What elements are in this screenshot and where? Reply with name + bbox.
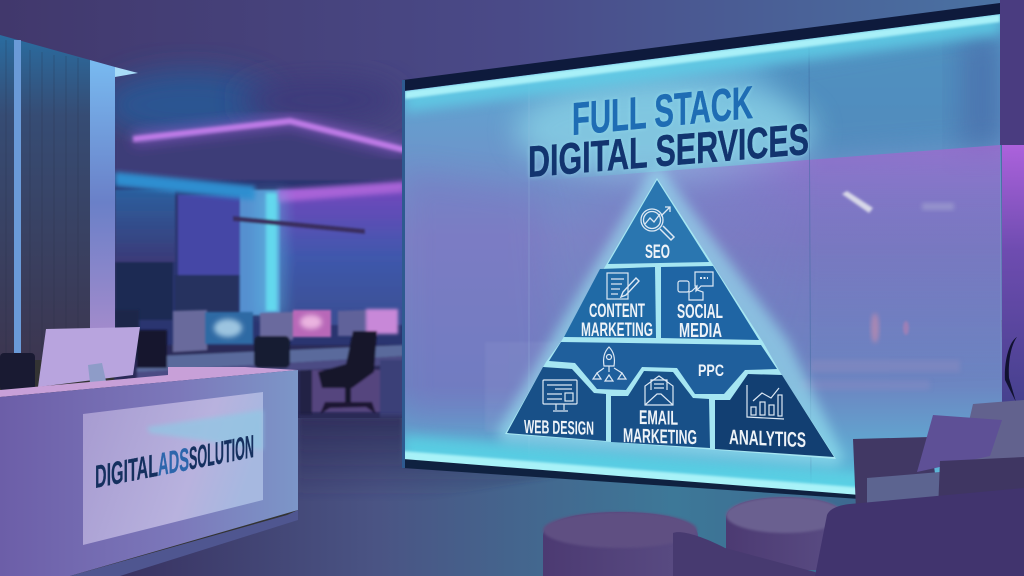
title: FULL STACK	[572, 76, 753, 145]
icon: chat bubbles	[678, 272, 713, 300]
monitor screens	[205, 312, 253, 344]
tier: email marketing: MARKETING	[623, 425, 697, 449]
tier: analytics	[715, 374, 834, 457]
room back wall	[115, 180, 405, 420]
office workstations	[115, 309, 405, 425]
tier: social media: MEDIA	[679, 320, 722, 342]
icon: rocket network	[593, 347, 626, 381]
upper teal wash	[764, 36, 998, 160]
back office room	[115, 121, 405, 420]
title glow	[515, 80, 815, 180]
tier: content marketing: MARKETING	[581, 320, 653, 341]
tier: web design: WEB DESIGN	[524, 417, 594, 440]
ceiling	[0, 0, 1024, 320]
tier: email marketing	[611, 371, 710, 449]
floor	[100, 416, 1024, 576]
icon: envelope	[645, 376, 673, 405]
tier: PPC	[549, 342, 777, 394]
reception monitor	[38, 327, 140, 387]
neon column	[266, 193, 277, 311]
logo sign: DIGITAL	[95, 447, 158, 495]
reflected purple band	[584, 145, 1000, 324]
office chairs	[254, 336, 290, 368]
ottoman front	[543, 512, 698, 576]
top LED	[405, 14, 1000, 112]
title: DIGITAL SERVICES	[528, 115, 809, 187]
tier: social media	[661, 266, 759, 342]
icon: bar chart	[747, 385, 784, 419]
title: DIGITAL SERVICES	[528, 115, 809, 187]
desks	[137, 345, 403, 372]
title: FULL STACK	[572, 76, 753, 145]
tier: analytics: ANALYTICS	[729, 426, 806, 452]
lounge furniture	[543, 400, 1024, 576]
pyramid halo	[507, 178, 834, 457]
glowing glass wall	[403, 14, 1005, 510]
icon: magnifier chart	[641, 207, 674, 240]
armchair	[960, 400, 1024, 460]
ottoman rear	[726, 497, 845, 570]
cove light purple	[277, 181, 405, 202]
logo sign	[83, 392, 263, 545]
sofa	[673, 532, 820, 576]
icon: document pencil	[607, 273, 639, 299]
bottom LED	[405, 430, 855, 488]
tier: content marketing	[564, 267, 656, 341]
tier: email marketing: EMAIL	[639, 407, 678, 430]
logo sign: ADS	[158, 441, 189, 483]
right side wall	[1000, 0, 1024, 410]
reflections of office	[842, 191, 873, 213]
tier: SEO	[608, 180, 709, 264]
ceiling purple light strip	[133, 121, 405, 150]
tier: SEO: SEO	[645, 242, 670, 263]
tier: PPC: PPC	[698, 361, 724, 380]
tier: web design	[507, 367, 606, 441]
window blinds	[115, 190, 175, 262]
reception desk: SOLUTION	[189, 428, 254, 477]
tier: content marketing: CONTENT	[589, 301, 645, 322]
title	[528, 76, 809, 187]
pendant lamp	[233, 216, 365, 234]
tier: social media: SOCIAL	[677, 301, 723, 323]
left pillar	[0, 35, 138, 360]
icon: monitor	[543, 380, 577, 411]
vertical seams	[528, 95, 530, 443]
cove light blue	[115, 172, 255, 200]
wall frame bars	[402, 3, 1000, 499]
pyramid chart	[505, 178, 836, 459]
reception desk	[0, 327, 298, 576]
cushion	[917, 415, 1002, 472]
